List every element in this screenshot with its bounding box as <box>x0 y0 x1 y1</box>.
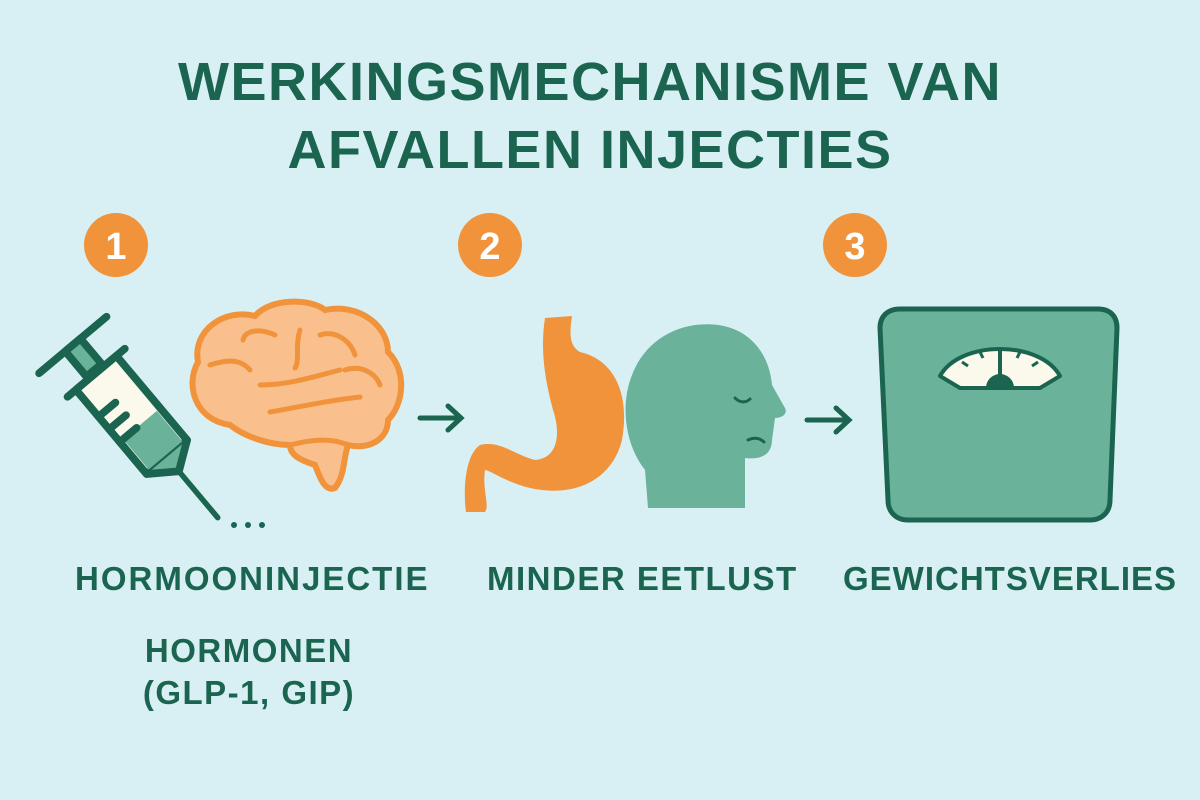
title: AFVALLEN INJECTIES <box>287 120 893 180</box>
dots <box>231 522 265 528</box>
title <box>178 52 1002 180</box>
icon: scale <box>880 309 1117 520</box>
text: hormones: HORMONEN <box>145 632 353 669</box>
icon: syringe <box>39 317 251 546</box>
title: WERKINGSMECHANISME VAN <box>178 52 1002 112</box>
step badge 1: 1 <box>105 226 127 268</box>
arrow 2 <box>807 408 849 432</box>
label: step 1: HORMOONINJECTIE <box>75 560 430 597</box>
step badge 1 <box>84 213 148 277</box>
label: step 2: MINDER EETLUST <box>487 560 798 597</box>
step badge 2 <box>458 213 522 277</box>
text: hormones: (GLP-1, GIP) <box>143 674 355 711</box>
text: hormones <box>143 632 355 711</box>
arrow 1 <box>420 406 461 430</box>
step badge 3: 3 <box>844 226 866 268</box>
icon: stomach <box>465 316 624 512</box>
icon: head <box>626 324 786 508</box>
step badge 2: 2 <box>479 226 501 268</box>
label: step 3: GEWICHTSVERLIES <box>843 560 1177 597</box>
icon: brain <box>193 302 401 489</box>
step badge 3 <box>823 213 887 277</box>
